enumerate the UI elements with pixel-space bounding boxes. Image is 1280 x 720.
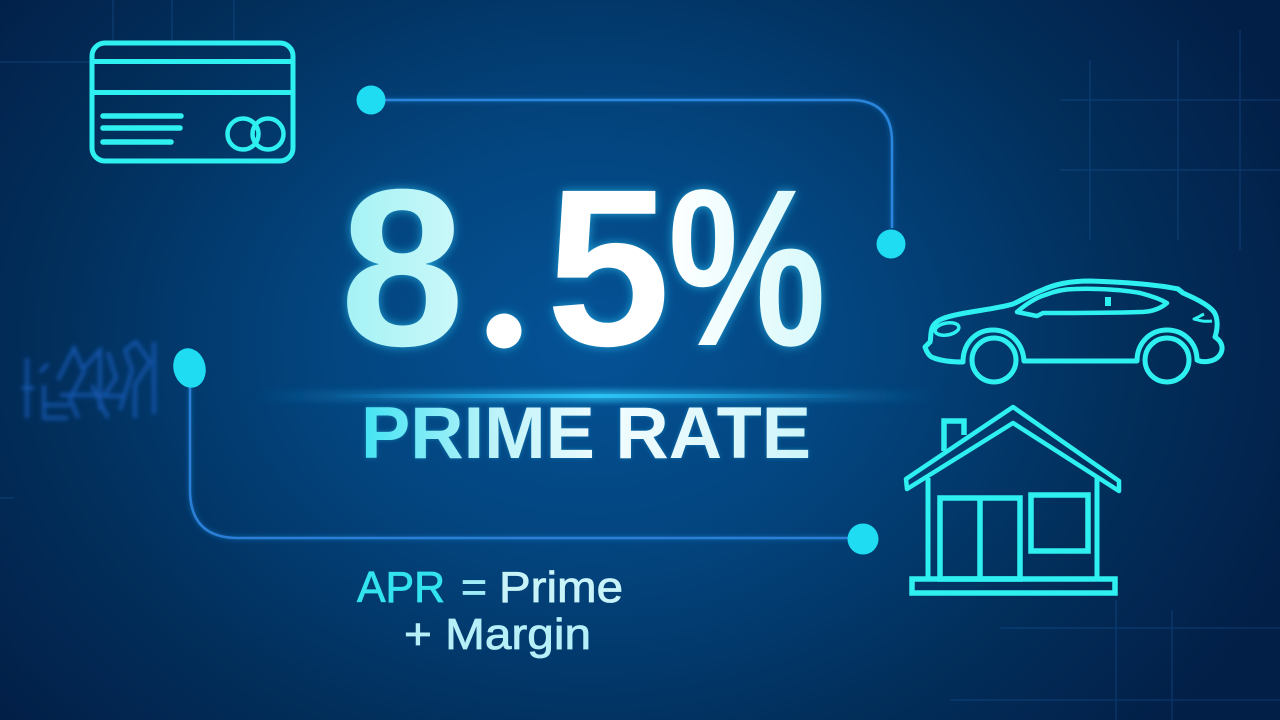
formula text: Prime xyxy=(499,563,623,612)
big number glow: 8 xyxy=(340,143,465,393)
tail light xyxy=(1194,314,1212,321)
connector: skyline to house xyxy=(169,345,878,554)
door xyxy=(940,498,1020,579)
headlight xyxy=(934,321,960,337)
background grid: lower right xyxy=(950,600,1280,720)
front wheel xyxy=(972,338,1016,382)
formula text: APR xyxy=(357,563,445,612)
chimney xyxy=(944,421,964,451)
icon: house xyxy=(906,407,1119,593)
connector: card to car xyxy=(356,86,906,258)
window xyxy=(1031,495,1088,551)
formula text: + Margin xyxy=(404,610,591,659)
icon: faint city skyline xyxy=(22,342,154,418)
big number: % xyxy=(668,143,826,393)
background grid: upper left xyxy=(0,0,234,498)
car body xyxy=(925,281,1222,362)
label glow: PRIME RATE xyxy=(361,393,811,474)
door handle xyxy=(1105,297,1111,306)
formula text xyxy=(357,563,623,659)
big number glow xyxy=(340,143,826,393)
car window xyxy=(1017,289,1167,316)
big number: . xyxy=(483,206,525,374)
big number: 5 xyxy=(546,143,671,393)
node: start dot xyxy=(356,86,386,114)
node: end dot xyxy=(876,230,906,258)
big number glow: 5 xyxy=(546,143,671,393)
rear wheel xyxy=(1145,338,1189,382)
icon: credit card xyxy=(92,43,293,161)
label: prime rate: PRIME RATE xyxy=(361,393,811,474)
icon: car xyxy=(925,281,1222,382)
big number glow: % xyxy=(668,143,826,393)
formula text: = xyxy=(461,563,487,612)
glowing divider xyxy=(250,390,940,402)
roof xyxy=(906,407,1119,491)
node: house dot xyxy=(848,524,878,554)
background grid: upper right xyxy=(1060,30,1280,250)
big number: 8 xyxy=(340,143,465,393)
big number xyxy=(340,143,826,393)
base xyxy=(912,579,1115,593)
walls xyxy=(928,478,1097,578)
node: skyline dot xyxy=(169,345,210,391)
